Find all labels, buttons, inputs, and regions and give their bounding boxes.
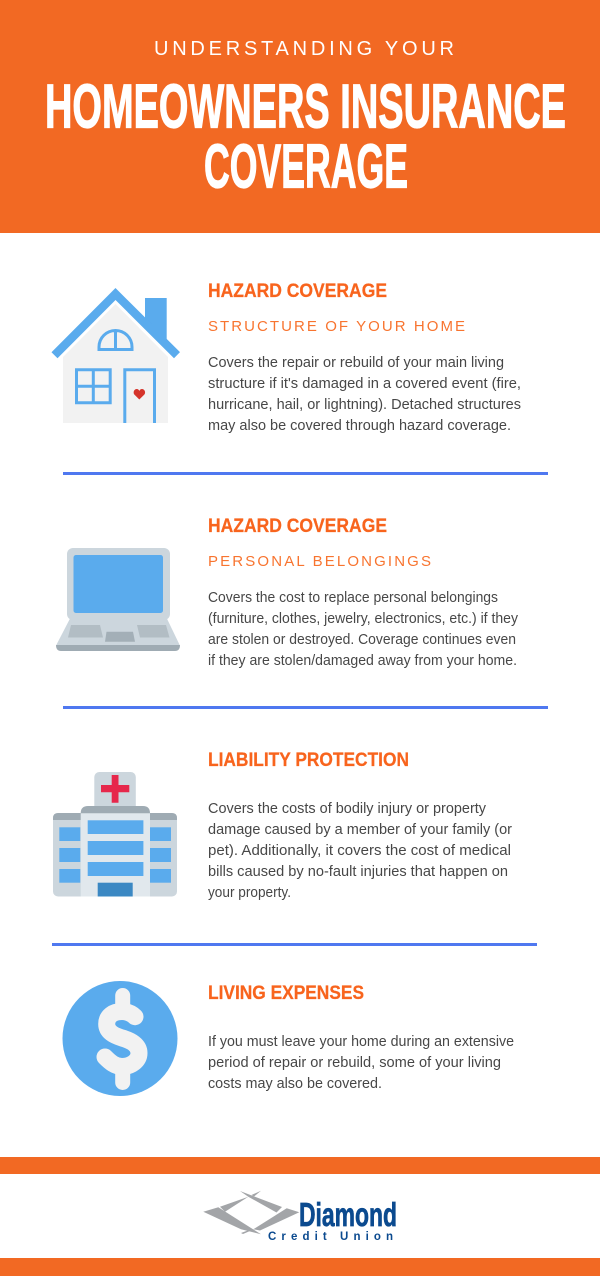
section 3 body: your property. xyxy=(208,885,291,901)
section 1 heading: HAZARD COVERAGE xyxy=(208,281,387,302)
section 4 body: period of repair or rebuild, some of your living xyxy=(208,1055,501,1071)
section 2 heading: HAZARD COVERAGE xyxy=(208,516,387,537)
section 4 body: costs may also be covered. xyxy=(208,1076,382,1092)
icon: laptop xyxy=(56,548,180,651)
main title: COVERAGE xyxy=(204,132,408,202)
section 3 text xyxy=(208,750,512,901)
section 1 body xyxy=(208,355,521,434)
section 2 body xyxy=(208,590,519,669)
header subtitle: UNDERSTANDING YOUR xyxy=(154,38,454,60)
logo: Diamond Credit Union xyxy=(203,1191,397,1243)
section 2 subheading: PERSONAL BELONGINGS xyxy=(208,553,431,570)
section 2 body: if they are stolen/damaged away from your home. xyxy=(208,653,517,669)
section 3 heading: LIABILITY PROTECTION xyxy=(208,750,409,771)
icon: house xyxy=(54,294,177,423)
section 1 text xyxy=(208,281,521,434)
icon: dollar coin xyxy=(62,981,178,1096)
main title xyxy=(45,72,566,202)
logo: Diamond Credit Union: Diamond xyxy=(299,1196,397,1233)
section 4 body xyxy=(208,1034,514,1092)
section 4 text xyxy=(208,983,514,1092)
section 4 heading: LIVING EXPENSES xyxy=(208,983,364,1004)
icon: hospital xyxy=(53,772,177,896)
logo: Diamond Credit Union: Credit Union xyxy=(268,1231,393,1243)
section 1 body: Covers the repair or rebuild of your main living xyxy=(208,355,504,371)
header banner xyxy=(0,0,600,233)
section 3 body: pet). Additionally, it covers the cost of medical xyxy=(208,843,511,859)
section 3 body: Covers the costs of bodily injury or property xyxy=(208,801,487,817)
section 3 body: damage caused by a member of your family (or xyxy=(208,822,512,838)
section 4 body: If you must leave your home during an extensive xyxy=(208,1034,514,1050)
section 3 body: bills caused by no-fault injuries that happen on xyxy=(208,864,508,880)
section 2 body: (furniture, clothes, jewelry, electronics, etc.) if they xyxy=(208,611,519,627)
section 2 text xyxy=(208,516,519,669)
section 2 body: are stolen or destroyed. Coverage continues even xyxy=(208,632,516,648)
section 1 body: may also be covered through hazard coverage. xyxy=(208,418,511,434)
section 2 body: Covers the cost to replace personal belongings xyxy=(208,590,498,606)
section 1 body: structure if it's damaged in a covered event (fire, xyxy=(208,376,521,392)
section 3 body xyxy=(208,801,512,901)
section 1 body: hurricane, hail, or lightning). Detached structures xyxy=(208,397,521,413)
section 1 subheading: STRUCTURE OF YOUR HOME xyxy=(208,318,465,335)
footer xyxy=(0,1157,600,1276)
